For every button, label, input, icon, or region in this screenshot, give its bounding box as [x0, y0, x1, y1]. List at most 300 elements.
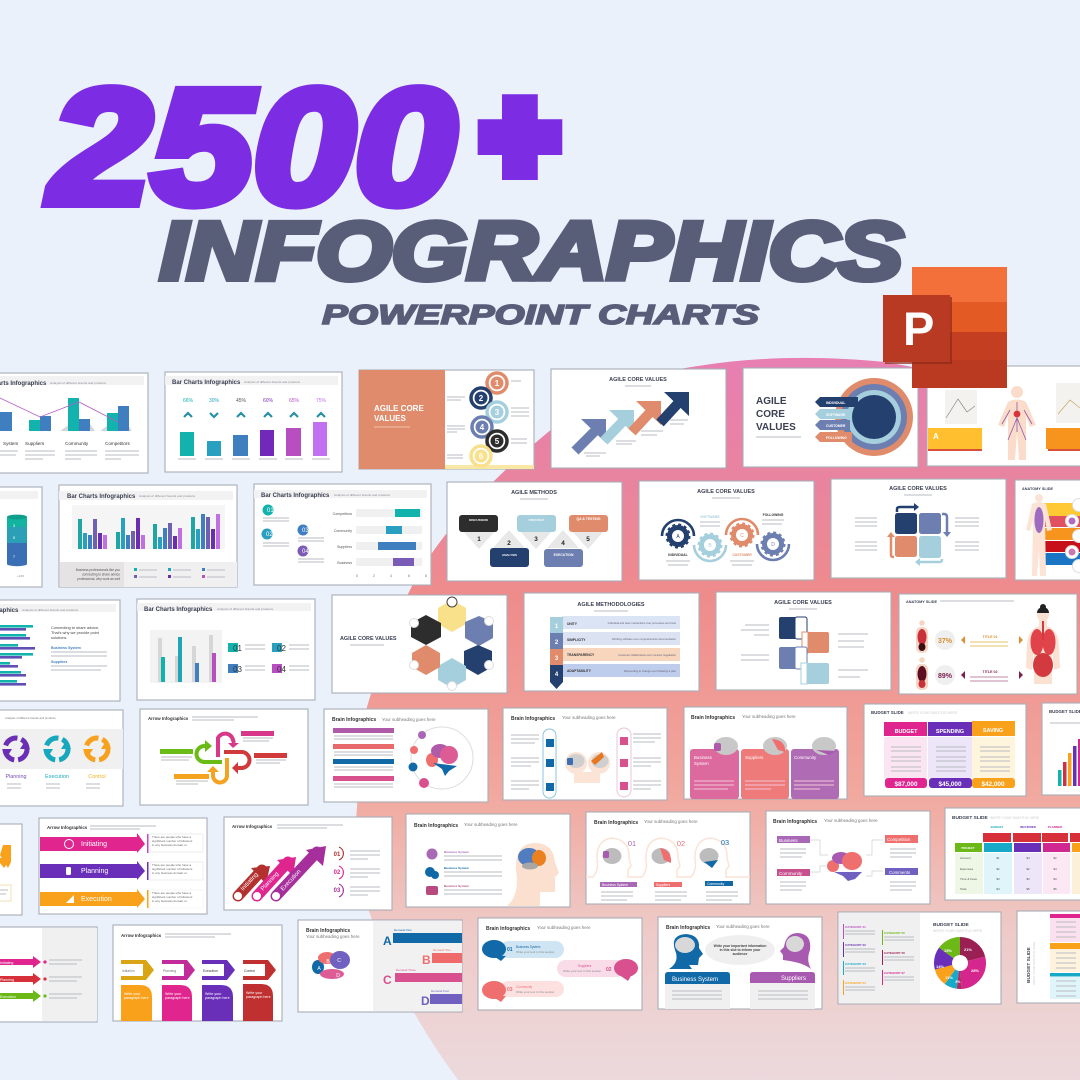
slide: budget table: $4	[1026, 856, 1030, 860]
slide: bar charts percentages: Bar Charts Infographics	[172, 380, 241, 386]
slide: agile core values circles	[359, 370, 534, 469]
slide: anatomy lungs: 37%	[938, 638, 953, 645]
title: 2500+: +	[481, 67, 554, 206]
slide: arrow chevrons tabs: paragraph here	[165, 996, 190, 1000]
slide: agile methodologies: AGILE METHODOLOGIES	[577, 602, 645, 608]
slide: cylinder chart: 7	[13, 554, 16, 559]
slide: arrow list: Execution	[81, 896, 112, 903]
slide: brain two heads: Brain Infographics	[666, 925, 710, 931]
pink gradient blob	[356, 358, 1080, 1080]
slide: cylinder chart: 3	[13, 523, 16, 528]
icon: PowerPoint logo: P	[903, 302, 934, 355]
slide: brain two heads: in this slot to inform your	[720, 948, 761, 952]
slide: brain tall columns	[684, 707, 847, 799]
slide: brain two heads: Suppliers	[781, 976, 806, 982]
slide: brain heads icons: Brain Infographics	[511, 716, 555, 722]
slide: brain connectors: Comments	[889, 870, 911, 875]
slide: brain three heads: Suppliers	[656, 883, 670, 887]
slide: agile methods: 4	[561, 540, 565, 547]
slide: bar charts percentages: 45%	[236, 398, 247, 404]
slide: arrow chevrons tabs: Write your	[124, 992, 141, 996]
slide: horizontal pair bars: That's why we provide point	[51, 630, 100, 635]
slide: budget table: PROJECT	[961, 846, 975, 850]
slide: brain head with icons: Brain Infographics	[414, 823, 458, 829]
slide: brain three heads: 02	[677, 839, 685, 848]
slide: budget table	[945, 808, 1080, 900]
icon: PowerPoint logo	[883, 267, 1007, 388]
slide: agile methodologies: 1	[555, 624, 559, 630]
slide: arrow list	[39, 818, 207, 914]
slide: arrow chevrons tabs: Write your	[246, 991, 263, 995]
slide: bar charts percentages: 30%	[209, 398, 220, 404]
slide: budget columns: $45,000	[938, 781, 962, 788]
slide: brain head with icons: Business System	[444, 884, 469, 888]
slide: budget table: $2	[1053, 856, 1057, 860]
slide: budget columns: BUDGET	[895, 729, 918, 735]
slide: brain circle list	[324, 709, 488, 802]
slide: horizontal progress bars: Business	[337, 561, 352, 565]
slide: brain three heads: Your subheading goes here	[644, 819, 698, 824]
slide: agile methods: AGILE METHODS	[511, 490, 557, 496]
slide: agile methodologies: Working software over comprehensive documentation	[612, 637, 676, 641]
slide: bar charts percentages: 66%	[183, 398, 194, 404]
slide: horizontal pair bars: solutions.	[51, 635, 67, 640]
slide: agile gears: INDIVIDUAL	[668, 553, 688, 557]
slide: budget donut: CATEGORY 03	[845, 962, 866, 966]
slide: bar charts with line: Suppliers	[25, 441, 45, 446]
slide: rising arrows	[224, 817, 392, 910]
slide: budget bars	[1042, 703, 1080, 795]
slide: agile target: CORE	[756, 409, 785, 420]
slide: arrow list: There are people who have a	[152, 835, 191, 839]
slide: horizontal progress bars: 8	[425, 574, 427, 578]
slide: rising arrows: Execution	[280, 869, 302, 892]
slide: bar charts with line: Community	[65, 441, 89, 446]
slide: agile linked boxes	[716, 592, 891, 690]
slide: horizontal pair bars	[0, 600, 120, 701]
slide: brain connectors: Your subheading goes here	[824, 818, 878, 823]
slide: agile methods	[447, 482, 622, 581]
slide: bar charts percentages: 65%	[289, 398, 300, 404]
slide: interlocking arrows	[140, 709, 308, 805]
slide: brain ABCD: C	[383, 973, 392, 987]
slide: column chart with numbers: 01	[233, 644, 242, 653]
slide: agile methodologies: ADAPTABILITY	[567, 669, 592, 673]
slide: brain pills: Write your text in this section	[516, 990, 555, 994]
slide: budget table: $3	[996, 877, 1000, 881]
slide: agile methods: 3	[534, 536, 538, 543]
slide: brain ABCD: Brain Infographics	[306, 928, 350, 934]
slide: agile methodologies: 4	[555, 672, 559, 678]
slide: brain ABCD	[298, 920, 462, 1012]
slide: horizontal pair bars: Analysis of different brands and products	[22, 608, 78, 612]
slide: bar charts with line: Competitors	[105, 441, 130, 446]
slide: arrow list: significant number of followers	[152, 895, 193, 899]
slide: brain ABCD: D	[336, 973, 340, 979]
slide: arrow chevrons tabs: paragraph here	[246, 995, 271, 999]
slide: budget table: $5	[1053, 887, 1057, 891]
slide: agile hexagons	[332, 595, 507, 693]
slide: brain ABCD: B	[422, 953, 431, 967]
slide: brain ABCD: Your subheading goes here	[306, 934, 360, 939]
slide: arrow list: There are people who have a	[152, 891, 191, 895]
slide: anatomy body charts	[927, 366, 1080, 466]
slide: agile methodologies: Individual and team interactions over processes and tools	[608, 621, 677, 625]
slide: horizontal progress bars: Analysis of different brands and products	[334, 493, 390, 497]
slide: brain three heads: Brain Infographics	[594, 820, 638, 826]
donut chart	[943, 946, 977, 980]
slide: column chart with numbers: Bar Charts Infographics	[144, 607, 213, 613]
slide: horizontal pair bars: Connecting to share advice,	[51, 625, 99, 630]
slide: anatomy body charts: A	[933, 432, 939, 441]
slide: budget donut: 14%	[936, 964, 944, 969]
slide: arrow chevrons tabs	[113, 925, 282, 1021]
slide: budget donut	[838, 912, 1001, 1004]
slide: budget table: $2	[1026, 867, 1030, 871]
slide: anatomy lungs: TITLE 01	[983, 635, 997, 639]
slide: budget rotated table: BUDGET SLIDE	[1026, 946, 1032, 983]
slide: horizontal pair bars: Business System	[51, 646, 81, 650]
slide: brain pills: 01	[507, 947, 513, 953]
slide: brain connectors	[766, 811, 930, 904]
slide: budget table: $4	[1053, 867, 1057, 871]
slide: rising arrows: Arrow Infographics	[232, 824, 273, 829]
slide: horizontal progress bars: 03	[302, 528, 309, 534]
slide: brain ABCD: C	[337, 958, 341, 964]
slide: agile methods: DISCUSSION	[469, 518, 488, 522]
slide: budget columns: SAVING	[983, 728, 1003, 734]
slide: agile methodologies: SIMPLICITY	[567, 638, 586, 642]
slide: agile core values circles: VALUES	[374, 414, 407, 423]
slide: brain pills: Community	[516, 985, 533, 989]
slide: brain ABCD: D	[421, 994, 430, 1008]
slide: cylinder chart: 5	[13, 535, 16, 540]
slide: brain heads icons: Your subheading goes here	[562, 715, 616, 720]
slide: budget donut: WRITE YOUR SUBTITLE HERE	[933, 929, 983, 933]
slide: horizontal progress bars: 6	[408, 574, 410, 578]
slide: anatomy lungs: TITLE 02	[983, 670, 997, 674]
slide: brain tall columns: Community	[794, 755, 817, 760]
slide: arrows with grey side: Planning	[0, 978, 14, 982]
slide: agile arrows	[551, 369, 726, 468]
slide: agile target: FOLLOWING	[826, 436, 847, 440]
slide: arrow chevrons tabs: Execution	[203, 969, 218, 973]
slide: arrow list: There are people who have a	[152, 863, 191, 867]
slide: agile methodologies: UNITY	[567, 622, 578, 626]
slide: agile core values circles: 3	[495, 408, 500, 417]
slide: agile target: INDIVIDUAL	[826, 401, 845, 405]
slide: agile methods: QA & TESTING	[576, 517, 601, 521]
slide: arrows with grey side: Initiating	[0, 961, 13, 965]
slide: brain pills: Your subheading goes here	[537, 925, 591, 930]
slide: arrow list: Planning	[81, 868, 108, 875]
slide: arrows with grey side: Execution	[0, 995, 16, 999]
slide: brain ABCD: B	[326, 959, 330, 965]
slide: budget columns	[864, 704, 1026, 796]
slide: anatomy lungs	[899, 594, 1077, 694]
slide: brain two heads: Write your important information	[714, 944, 766, 948]
slide: budget columns: $87,000	[894, 781, 918, 788]
slide: brain ABCD: Demand One	[394, 928, 412, 932]
slide: agile methodologies: Responding to change over following a plan	[624, 669, 676, 673]
slide: brain three heads: Business System	[602, 883, 628, 887]
slide: brain pills: Write your text in this section	[516, 950, 555, 954]
slide: arrow list: Initiating	[81, 841, 107, 848]
slide: column chart with numbers: 03	[233, 665, 242, 674]
slide: agile core values circles: AGILE CORE	[374, 404, 424, 413]
slide: horizontal progress bars: 0	[356, 574, 358, 578]
slide: arrow down partial	[0, 824, 22, 915]
slide: brain tall columns: Business	[694, 755, 713, 760]
slide: brain pills: Brain Infographics	[486, 926, 530, 932]
slide: budget table: $2	[996, 867, 1000, 871]
slide: agile linked boxes: AGILE CORE VALUES	[774, 600, 832, 606]
slide: brain ABCD: Demand Three	[396, 968, 416, 972]
slide: anatomy stripes	[1015, 480, 1080, 580]
slide: horizontal progress bars: Bar Charts Infographics	[261, 493, 330, 499]
slide: agile target: VALUES	[756, 422, 796, 433]
slide: budget rotated table: WRITE YOUR SUBTITLE HERE	[1032, 942, 1036, 985]
slide: grouped bar chart	[59, 485, 237, 587]
slide: brain connectors: Community	[779, 871, 803, 876]
slide: brain head with icons	[406, 814, 570, 907]
slide: grouped bar chart: professional, why work as well	[77, 577, 120, 581]
slide: budget columns: BUDGET SLIDE	[871, 710, 904, 715]
slide: cycle icons: Planning	[6, 774, 26, 780]
slide: horizontal progress bars: Competitors	[333, 512, 352, 516]
slide: agile methodologies: 3	[555, 656, 559, 662]
slide: brain connectors: Competition	[887, 837, 911, 842]
title: 2500+: 2500	[47, 55, 456, 238]
slide: agile methodologies: TRANSPARENCY	[567, 653, 595, 657]
slide: agile target: AGILE	[756, 396, 787, 407]
slide: arrows with grey side	[0, 927, 97, 1022]
slide: budget donut: 21%	[964, 947, 972, 952]
slide: budget table: $4	[996, 887, 1000, 891]
slide: budget table: Total	[960, 887, 967, 891]
slide: agile gears: AGILE CORE VALUES	[697, 489, 755, 495]
slide: arrow chevrons tabs: Write your	[205, 992, 222, 996]
slide grid	[0, 366, 1080, 1022]
slide: arrow chevrons tabs: Arrow Infographics	[121, 933, 162, 938]
slide: brain ABCD: A	[317, 966, 321, 972]
slide: agile methodologies: Customer collaboration over contract negotiation	[618, 653, 676, 657]
slide: brain two heads: audience	[733, 952, 747, 956]
slide: agile target: SOFTWARE	[826, 413, 846, 417]
slide: agile gears: B	[708, 543, 712, 549]
slide: budget donut: CATEGORY 05	[884, 931, 905, 935]
slide: interlocking arrows: Arrow Infographics	[148, 716, 189, 721]
slide: agile methods: 2	[507, 540, 511, 547]
slide: budget table: Account	[960, 856, 971, 860]
slide: budget donut: CATEGORY 04	[845, 981, 866, 985]
slide: horizontal progress bars: 01	[267, 508, 274, 514]
slide: arrow chevrons tabs: paragraph here	[205, 996, 230, 1000]
slide: agile gears	[639, 481, 814, 580]
slide: grouped bar chart: Analysis of different brands and products	[139, 494, 195, 498]
slide: agile squares cycle	[831, 479, 1006, 578]
slide: horizontal progress bars	[254, 484, 431, 585]
slide: anatomy stripes: ANATOMY SLIDE	[1022, 487, 1053, 491]
slide: brain ABCD: Demand Two	[433, 948, 451, 952]
slide: bar charts percentages: Analysis of different brands and products	[244, 380, 300, 384]
slide: budget donut: 15%	[944, 948, 952, 953]
slide: horizontal progress bars: Suppliers	[337, 545, 352, 549]
slide: budget columns: WRITE YOUR SUBTITLE HERE	[908, 711, 958, 715]
slide: budget table: PLANNED	[1048, 825, 1063, 829]
slide: bar charts percentages	[165, 372, 342, 472]
slide: arrow list: in any business domain or	[152, 899, 187, 903]
slide: agile core values circles: 6	[479, 452, 484, 461]
slide: brain tall columns: System	[694, 761, 709, 766]
slide: agile methods: EXECUTION	[554, 553, 574, 557]
slide: arrow chevrons tabs: Write your	[165, 992, 182, 996]
slide: budget table: $3	[1053, 877, 1057, 881]
slide: brain pills: 02	[606, 967, 612, 973]
slide: rising arrows: Planning	[260, 871, 280, 892]
slide: budget donut: 8%	[956, 980, 960, 984]
slide: budget donut: 11%	[945, 975, 953, 980]
slide: agile arrows: AGILE CORE VALUES	[609, 377, 667, 383]
slide: budget table: WRITE YOUR SUBTITLE HERE	[990, 816, 1040, 820]
slide: brain two heads: Business System	[672, 977, 718, 983]
slide: bar charts with line: System	[3, 441, 18, 446]
slide: agile gears: SOFTWARE	[700, 515, 720, 519]
slide: budget table: INCURRED	[1020, 825, 1037, 829]
slide: agile squares cycle: AGILE CORE VALUES	[889, 486, 947, 492]
slide: anatomy lungs: 89%	[938, 673, 953, 680]
slide: grouped bar chart: Business professionals like you	[76, 568, 120, 572]
slide: budget donut: BUDGET SLIDE	[933, 922, 970, 928]
slide: grouped bar chart: Bar Charts Infographics	[67, 494, 136, 500]
slide: horizontal pair bars: Suppliers	[51, 660, 67, 664]
slide: rising arrows: 01	[334, 852, 341, 858]
slide: arrow list: in any business domain or	[152, 843, 187, 847]
slide: brain tall columns: Suppliers	[745, 755, 764, 760]
slide: budget table: Time & Fees	[960, 877, 977, 881]
slide: brain three heads: Community	[707, 882, 724, 886]
slide: agile core values circles: 1	[495, 379, 500, 388]
slide: brain two heads: Your subheading goes here	[716, 924, 770, 929]
slide: brain connectors: Business	[779, 838, 798, 843]
slide: column chart with numbers: 04	[277, 665, 286, 674]
slide: brain head with icons: Business System	[444, 850, 469, 854]
slide: cycle icons: Control	[88, 774, 106, 780]
slide: brain three heads: 03	[721, 838, 729, 847]
slide: budget columns: $42,000	[981, 781, 1005, 788]
slide: brain tall columns: Brain Infographics	[691, 715, 735, 721]
slide: agile gears: C	[740, 533, 744, 539]
slide: rising arrows: 02	[334, 870, 341, 876]
slide: arrow chevrons tabs: Initiation	[122, 969, 135, 973]
slide: brain head with icons: Business System	[444, 866, 469, 870]
subheading: POWERPOINT CHARTS: POWERPOINT CHARTS	[322, 299, 759, 330]
slide: budget table: Expenses	[960, 867, 974, 871]
slide: budget table: $5	[1026, 887, 1030, 891]
slide: brain three heads: 01	[628, 839, 636, 848]
slide: budget table: BUDGET	[991, 825, 1003, 829]
slide: rising arrows: 03	[334, 888, 341, 894]
slide: agile hexagons: AGILE CORE VALUES	[340, 636, 397, 642]
slide: brain pills: Business System	[516, 945, 541, 949]
slide: budget columns: SPENDING	[936, 729, 964, 735]
slide: brain heads icons	[503, 708, 667, 800]
slide: budget table: $1	[996, 856, 1000, 860]
slide: cycle icons: Analysis of different brands and products	[5, 716, 56, 720]
slide: agile methods: STRATEGY	[528, 518, 545, 522]
slide: arrow list: Arrow Infographics	[47, 825, 88, 830]
slide: brain ABCD: A	[383, 934, 392, 948]
slide: agile methods: 1	[477, 536, 481, 543]
slide: brain pills: Suppliers	[578, 964, 592, 968]
slide: brain ABCD: Demand Four	[431, 989, 449, 993]
slide: agile core values circles: 5	[495, 437, 500, 446]
slide: brain connectors: Brain Infographics	[773, 819, 817, 825]
slide: column chart with numbers: 02	[277, 644, 286, 653]
slide: column chart with numbers	[137, 599, 315, 700]
slide: arrow chevrons tabs: Control	[244, 969, 255, 973]
slide: bar charts percentages: 75%	[316, 398, 327, 404]
slide: agile target	[743, 368, 918, 467]
slide: agile gears: CUSTOMER	[732, 553, 752, 557]
slide: bar charts percentages: 60%	[263, 398, 274, 404]
slide: agile gears: D	[771, 542, 775, 548]
slide: grouped bar chart: connecting to share advice	[82, 572, 120, 576]
slide: budget donut: CATEGORY 01	[845, 925, 866, 929]
slide: budget donut: CATEGORY 06	[884, 951, 905, 955]
slide: budget donut: 28%	[971, 968, 979, 973]
slide: brain three heads	[586, 812, 750, 904]
slide: horizontal progress bars: 4	[390, 574, 392, 578]
slide: brain tall columns: Your subheading goes here	[742, 714, 796, 719]
slide: agile methods: ANALYSIS	[502, 553, 517, 557]
slide: budget table: $3	[1026, 877, 1030, 881]
slide: anatomy lungs: ANATOMY SLIDE	[906, 600, 937, 604]
slide: bar charts with line	[0, 373, 148, 473]
heading: INFOGRAPHICS: INFOGRAPHICS	[160, 206, 903, 297]
slide: agile gears: FOLLOWING	[763, 513, 784, 517]
slide: agile methods: 5	[586, 536, 590, 543]
slide: arrow list: in any business domain or	[152, 871, 187, 875]
slide: brain circle list: Your subheading goes here	[382, 717, 436, 722]
slide: brain circle list: Brain Infographics	[332, 717, 376, 723]
slide: horizontal progress bars: 02	[266, 532, 273, 538]
slide: horizontal progress bars: 2	[373, 574, 375, 578]
slide: budget table: BUDGET SLIDE	[952, 815, 989, 821]
slide: brain head with icons: Your subheading goes here	[464, 822, 518, 827]
slide: horizontal progress bars: 04	[302, 549, 309, 555]
slide: bar charts with line: Analysis of different brands and products	[50, 381, 106, 385]
slide: agile methodologies	[524, 593, 699, 691]
slide: cylinder chart: +100	[17, 574, 24, 578]
slide: arrow list: significant number of followers	[152, 867, 193, 871]
slide: brain pills: Write your text in this section	[563, 969, 602, 973]
slide: agile target: CUSTOMER	[826, 424, 846, 428]
slide: brain two heads	[658, 917, 822, 1009]
slide: cycle icons	[0, 710, 123, 806]
slide: cylinder chart	[0, 487, 42, 587]
slide: agile gears: A	[676, 534, 680, 540]
slide: brain pills: 03	[507, 987, 513, 993]
slide: arrow chevrons tabs: Planning	[163, 969, 176, 973]
slide: rising arrows: Initiating	[240, 872, 260, 892]
slide: brain pills	[478, 918, 642, 1010]
slide: budget donut: CATEGORY 07	[884, 971, 905, 975]
slide: arrow list: significant number of followers	[152, 839, 193, 843]
slide: arrow chevrons tabs: paragraph here	[124, 996, 149, 1000]
slide: horizontal progress bars: Community	[334, 529, 352, 533]
slide: agile core values circles: 2	[479, 394, 484, 403]
